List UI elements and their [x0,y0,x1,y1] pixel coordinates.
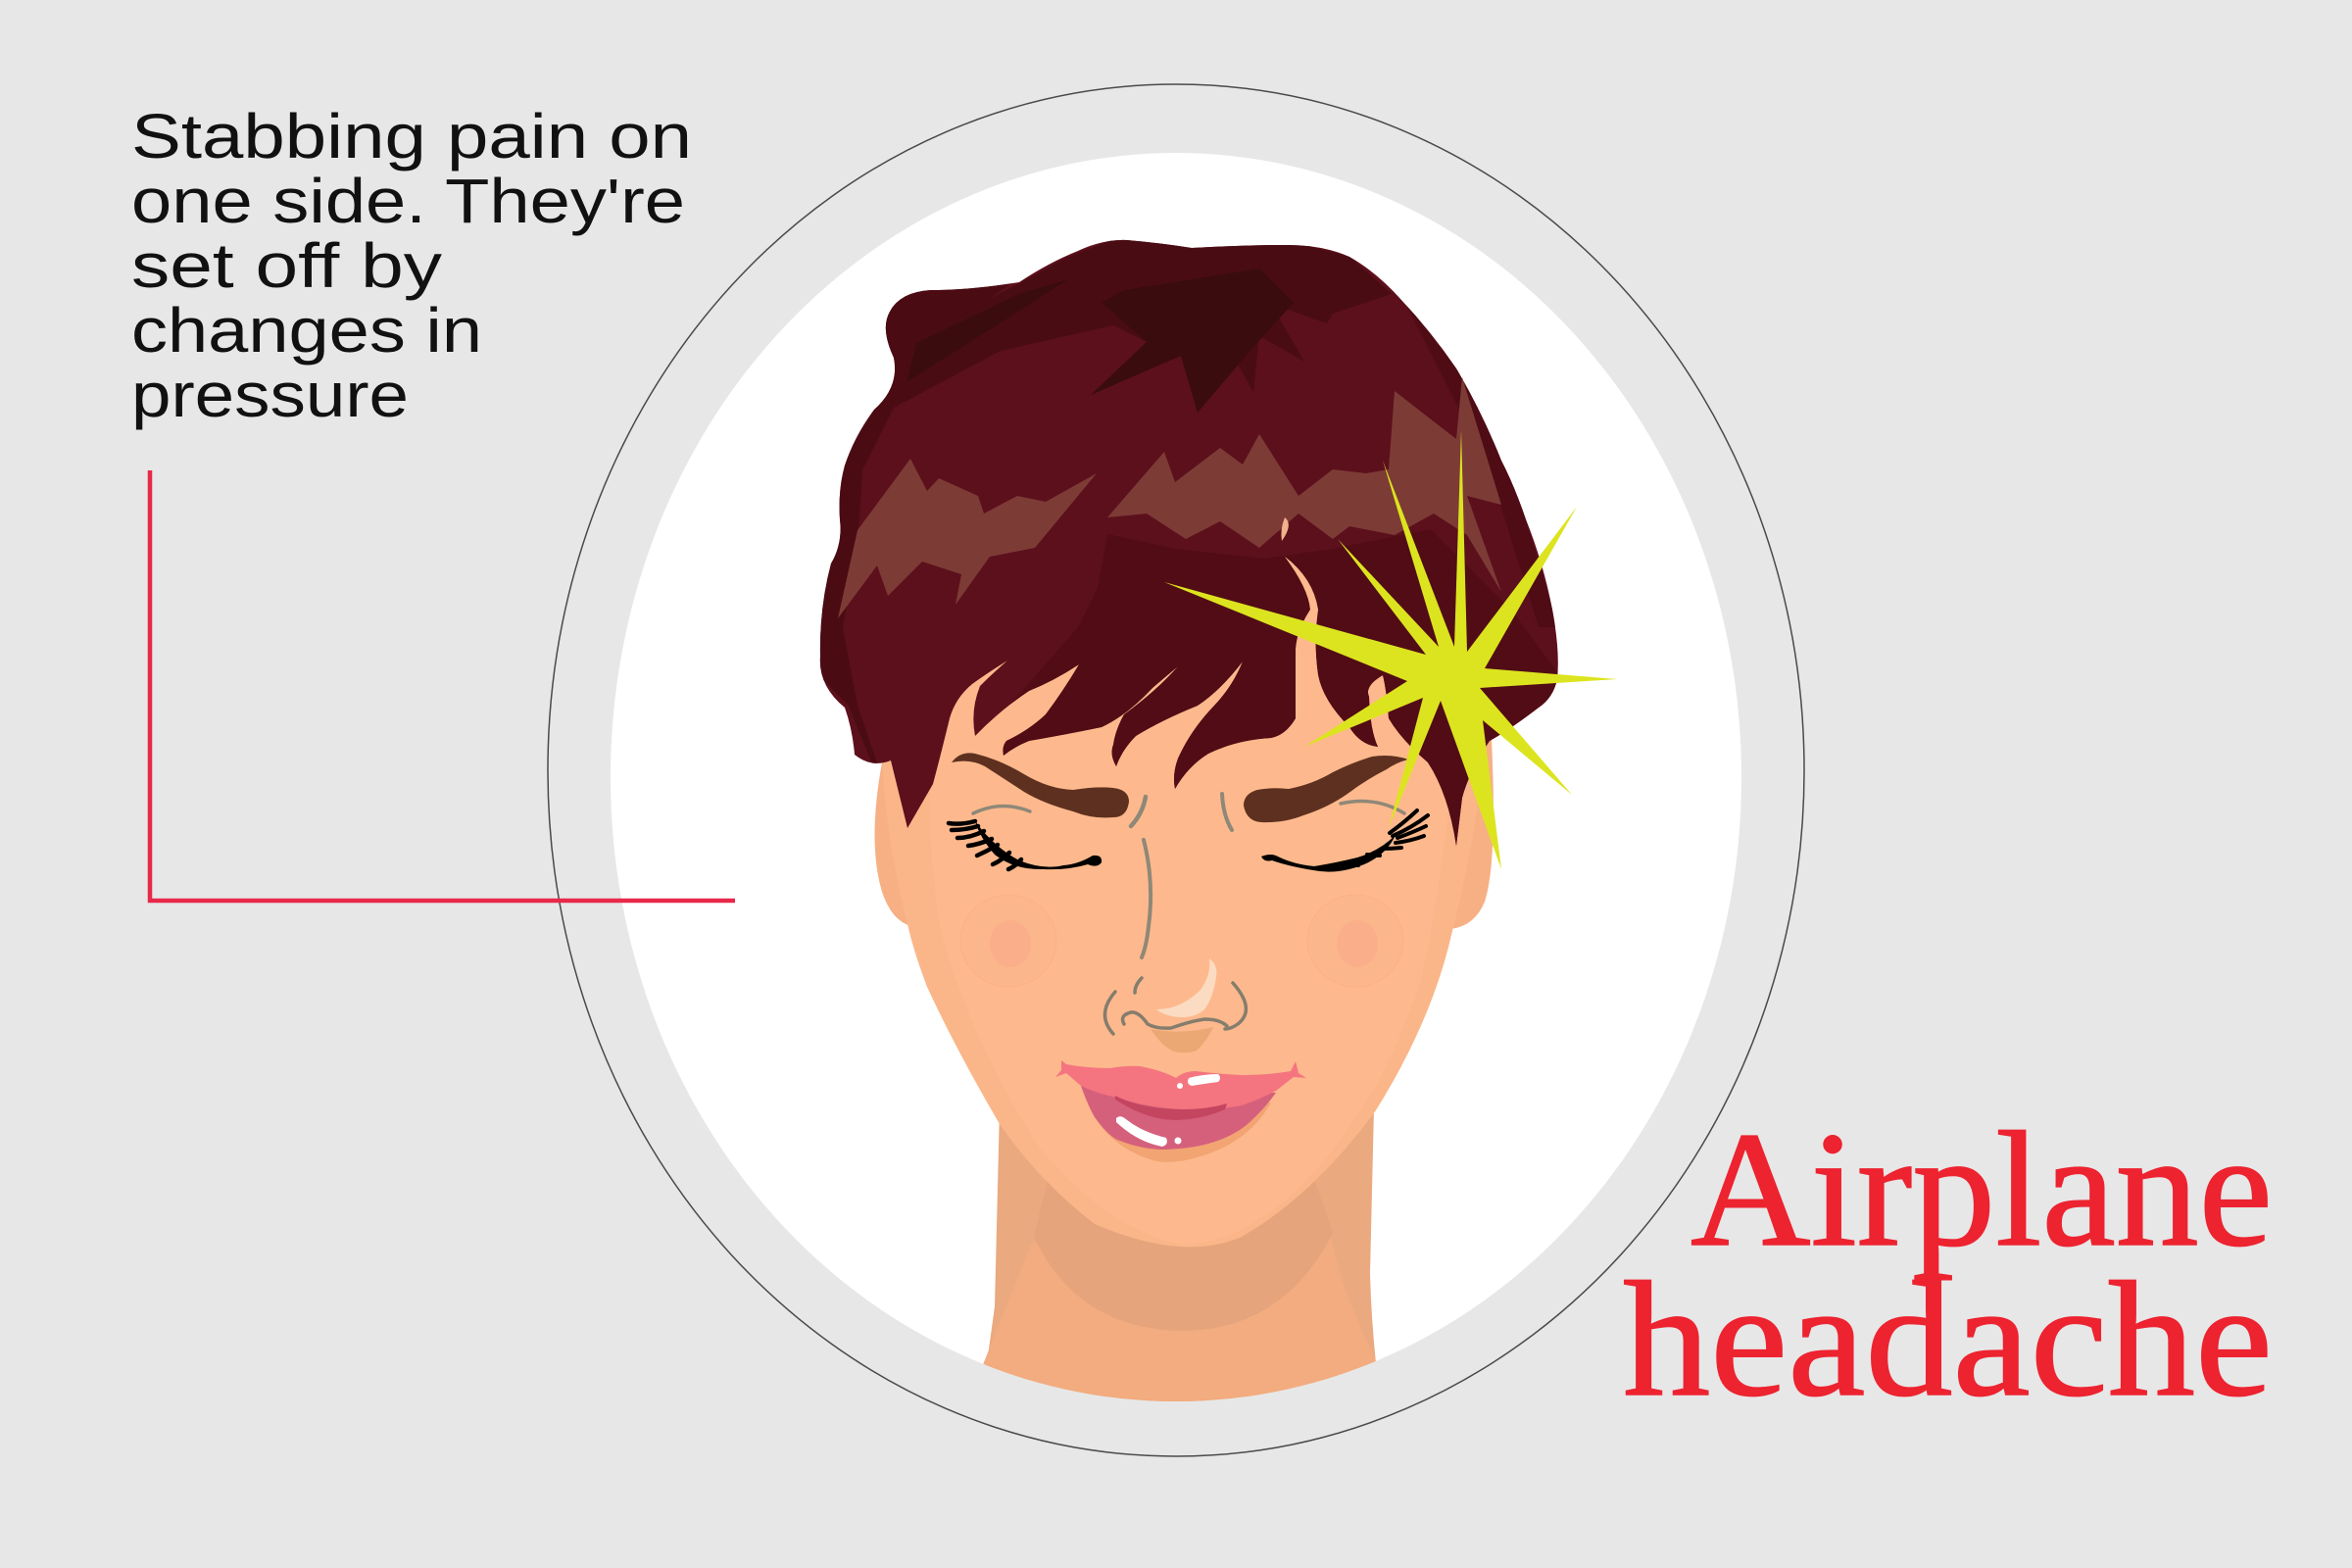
callout text: pressure [131,360,409,430]
hair [813,235,1568,862]
illustration: woman's head with headache [813,235,1617,1411]
hair shading [813,277,1568,862]
title: Airplane [1690,1099,2273,1281]
eyebrows [952,753,1408,822]
ears [874,740,1494,929]
callout text: Stabbing pain on [131,101,692,172]
callout text: changes in [131,295,482,366]
infographic: airplane headache [133,83,2268,1457]
white portrait ellipse [611,153,1741,1401]
icon: yellow pain star [1164,430,1617,869]
dark crown of hair [894,235,1392,413]
callout text [131,101,692,430]
outer ellipse outline [548,84,1804,1456]
hair highlight centre [1107,377,1501,592]
callout text: set off by [131,230,442,301]
title [1623,1099,2273,1431]
hair highlight left [838,459,1097,618]
arrow: red callout line [150,470,735,901]
closed eye left [949,821,1102,869]
skin strand through fringe [1285,557,1349,727]
cheeks [960,895,1403,987]
callout text: one side. They're [131,166,685,236]
face [882,588,1486,1247]
neck [980,1107,1382,1411]
title: headache [1623,1249,2273,1431]
nose [1104,958,1246,1053]
eye and brow creases [973,794,1404,957]
lips [1055,1060,1306,1162]
closed eye right [1261,810,1428,872]
